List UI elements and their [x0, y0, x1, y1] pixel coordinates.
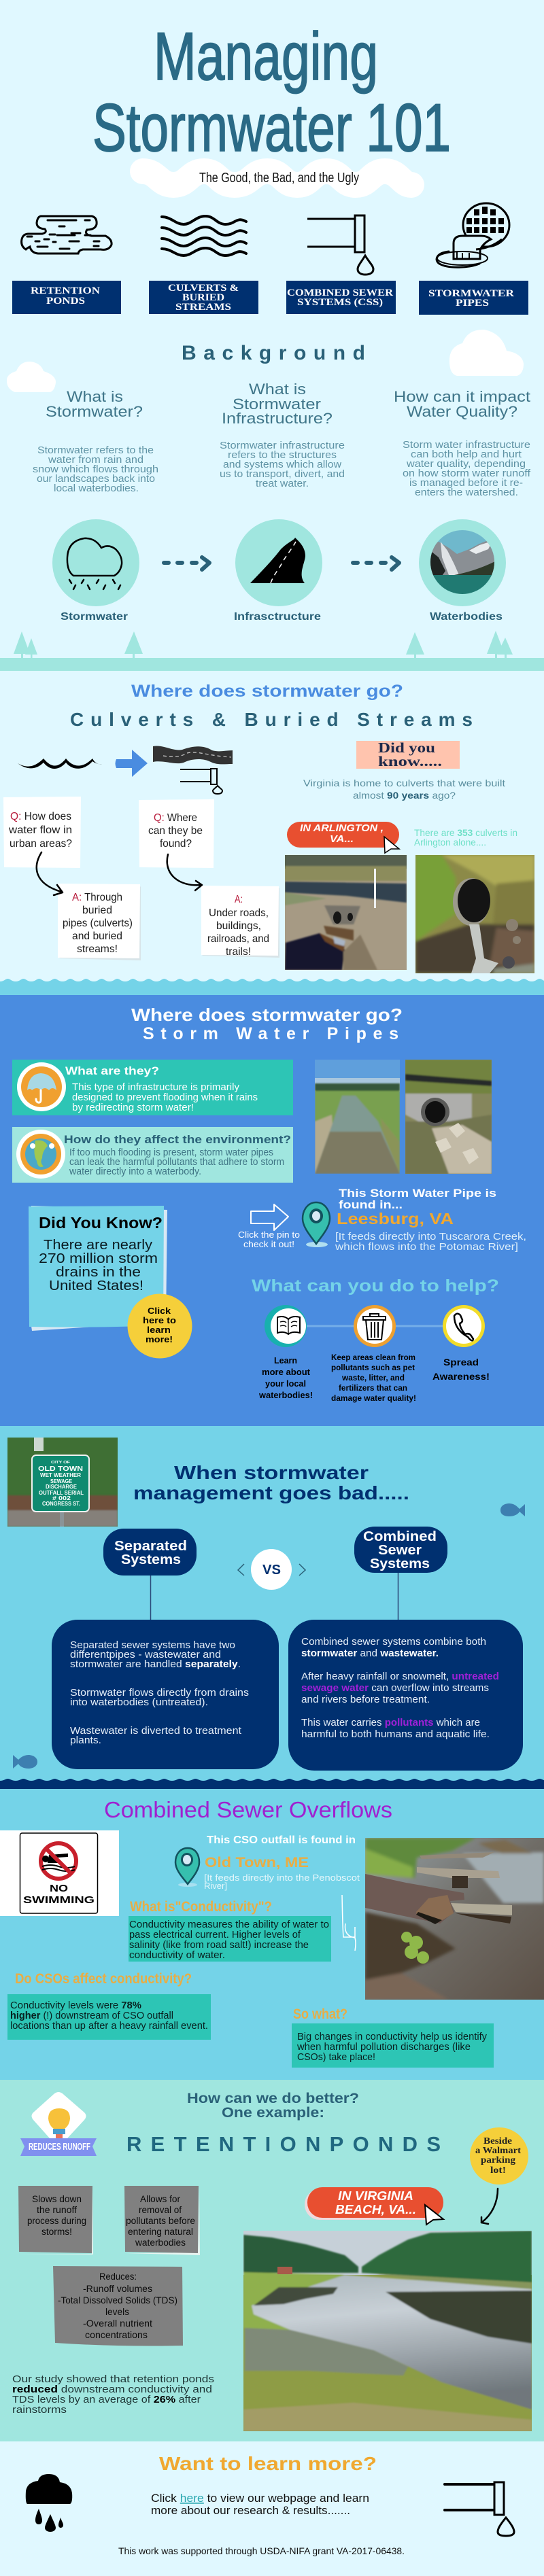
panel: separated systems: differentpipes - wastewater and — [70, 1650, 221, 1660]
arrow: dashed one — [164, 557, 209, 570]
heading: when stormwater management goes bad — [133, 1462, 409, 1503]
card: question one: water flow in — [8, 824, 72, 836]
text: virginia culverts fact: Virginia is home to culverts that were built — [303, 778, 505, 788]
panel: how do they affect the environment: can leak the harmful pollutants that adhere to storm — [69, 1157, 284, 1168]
heading: how can we do better: One example: — [222, 2105, 324, 2121]
card: answer one: A: Through — [72, 892, 122, 903]
heading: want to learn more: Want to learn more? — [159, 2453, 377, 2474]
panel: combined sewer systems: harmful to both humans and aquatic life. — [301, 1729, 490, 1740]
label: separated systems: Systems — [121, 1552, 181, 1567]
photo: old town sign: DISCHARGE — [46, 1484, 78, 1490]
panel: what is stormwater: snow which flows through — [33, 464, 158, 475]
label: combined sewer systems: Combined — [363, 1529, 437, 1544]
text: click the pin: check it out! — [243, 1239, 294, 1249]
card: reduces: -Total Dissolved Solids (TDS) — [58, 2295, 177, 2305]
text: learn more: waterbodies! — [258, 1391, 313, 1400]
text: old town: [It feeds directly into the Penobscot — [204, 1873, 360, 1883]
badge: reduces runoff: REDUCES RUNOFF — [29, 2141, 90, 2153]
topic labels: PONDS — [46, 296, 85, 307]
icon: telephone — [443, 1305, 485, 1347]
panel: what is stormwater infrastructure: What is — [249, 381, 306, 398]
text: keep areas clean — [331, 1354, 416, 1403]
heading: combined sewer overflows: Combined Sewer Overflows — [104, 1797, 392, 1822]
text: virginia culverts fact — [303, 778, 505, 801]
arrow: curved black — [481, 2189, 498, 2224]
panel: so what — [292, 2006, 494, 2068]
topic labels: RETENTION — [31, 285, 100, 296]
image: no swimming sign: SWIMMING — [23, 1894, 95, 1906]
card: slows down: the runoff — [37, 2205, 77, 2215]
card: answer one: streams! — [77, 943, 118, 955]
panel: water quality impact: Water Quality? — [407, 403, 517, 420]
icon: book — [265, 1305, 307, 1347]
card: reduces: levels — [105, 2306, 129, 2317]
panel: separated systems: into waterbodies (untreated). — [70, 1697, 208, 1708]
card: answer two: Under roads, — [209, 907, 269, 919]
panel: separated systems: Wastewater is diverted to treatment — [70, 1726, 241, 1737]
button: click here: learn — [147, 1325, 171, 1335]
text: pipe location: found in... — [339, 1198, 403, 1211]
panel: do csos affect conductivity: locations than up after a heavy rainfall event. — [10, 2021, 208, 2032]
image: no swimming sign: NO — [50, 1883, 68, 1894]
panel: water quality impact: can both help and hurt — [411, 449, 522, 460]
panel: what is conductivity — [129, 1899, 331, 1962]
text: study results — [12, 2373, 214, 2416]
heading: where does stormwater go: Where does stormwater go? — [131, 682, 403, 701]
card: answer one — [58, 884, 141, 960]
callout: did you know card: United States! — [49, 1278, 143, 1293]
card: reduces: -Runoff volumes — [83, 2283, 152, 2294]
callout: did you know card — [29, 1206, 167, 1331]
arrow: dashed two — [353, 557, 399, 570]
text: spread awareness — [432, 1357, 490, 1382]
panel: what is stormwater: Stormwater? — [46, 403, 143, 420]
panel: what is stormwater infrastructure: treat water. — [256, 478, 309, 489]
photo: leesburg channel — [315, 1060, 400, 1174]
arrow: curved two — [167, 854, 202, 890]
text: pipe location: which flows into the Potomac River] — [335, 1241, 518, 1253]
callout: beside a walmart: parking — [481, 2155, 515, 2165]
subtitle on white wave: The Good, the Bad, and the Ugly — [199, 171, 359, 186]
photo: old town sign — [7, 1438, 118, 1527]
panel: what is stormwater: local waterbodies. — [54, 483, 139, 494]
card: allows for removal: removal of — [139, 2205, 182, 2215]
panel: so what: So what? — [293, 2006, 347, 2022]
panel: what are they: by redirecting storm water! — [72, 1102, 194, 1113]
heading: when stormwater management goes bad: management goes bad..... — [133, 1482, 409, 1503]
panel: what is stormwater infrastructure: Stormwater — [233, 396, 321, 413]
panel: what is stormwater: water from rain and — [48, 454, 143, 466]
captions for flow: Stormwater — [61, 611, 128, 623]
icon: trash can — [354, 1305, 396, 1347]
text: pipe location — [335, 1187, 526, 1253]
photo: old town sign: SEWAGE — [50, 1478, 73, 1484]
icon: storm drain grate and pipe — [437, 203, 509, 267]
text: pipe location: [It feeds directly into Tuscarora Creek, — [335, 1231, 526, 1242]
card: allows for removal — [124, 2186, 200, 2255]
callout: in arlington — [287, 822, 399, 853]
panel: how do they affect the environment — [12, 1127, 293, 1183]
panel: what are they: This type of infrastructure is primarily — [72, 1081, 239, 1093]
text: click here: more about our research & results....... — [151, 2504, 350, 2517]
photo: retention pond — [243, 2231, 532, 2431]
topic labels: COMBINED SEWER — [287, 288, 393, 298]
panel: separated systems: stormwater are handled separately . — [70, 1659, 241, 1670]
card: answer one: and buried — [72, 930, 122, 942]
panel: do csos affect conductivity: Do CSOs affect conductivity? — [15, 1971, 192, 1987]
card: answer two: A: — [235, 894, 243, 905]
icon: waterbodies circle — [419, 519, 506, 606]
panel: what is stormwater infrastructure: us to transport, divert, and — [220, 468, 345, 480]
panel: water quality impact: on how storm water runoff — [403, 468, 531, 479]
trees — [14, 631, 513, 659]
icon: fish right — [500, 1503, 525, 1516]
title — [92, 18, 451, 165]
card: allows for removal: entering natural — [128, 2227, 193, 2237]
text: study results: reduced downstream conductivity and — [12, 2384, 212, 2395]
panel: so what: when harmful pollution discharges (like — [296, 2042, 471, 2053]
panel: combined sewer systems — [288, 1620, 523, 1771]
panel: how do they affect the environment: How do they affect the environment? — [64, 1133, 291, 1146]
text: click the pin — [238, 1230, 300, 1249]
text: keep areas clean: damage water quality! — [331, 1395, 416, 1403]
callout: did you know card: 270 million storm — [39, 1251, 158, 1266]
callout: did you know: know..... — [378, 753, 442, 769]
heading: culverts and buried streams: Culverts & Buried Streams — [70, 709, 473, 730]
text: virginia culverts fact: almost 90 years ago? — [353, 790, 456, 801]
text: old town: Old Town, ME — [205, 1855, 309, 1870]
callout: did you know card: There are nearly — [44, 1238, 152, 1253]
panel: what are they: What are they? — [65, 1064, 159, 1077]
callout: beside a walmart: Beside — [483, 2136, 512, 2146]
panel: water quality impact: How can it impact — [394, 388, 530, 405]
card: question two: Q: Where — [154, 812, 197, 824]
arrow: white outline to pin — [251, 1204, 288, 1230]
text: click here: Click here to view our webpage and learn — [151, 2492, 369, 2505]
photo: old town sign: OLD TOWN — [38, 1465, 83, 1473]
heading: background: Background — [182, 342, 365, 364]
panel: what are they — [12, 1060, 293, 1115]
icon: buried stream waves — [162, 216, 246, 256]
callout: in arlington: IN ARLINGTON , — [300, 822, 384, 834]
captions for flow: Infrasctructure — [234, 611, 321, 623]
card: question one: urban areas? — [10, 838, 72, 850]
panel: do csos affect conductivity: Conductivity levels were 78% — [10, 2000, 141, 2011]
panel: separated systems: Stormwater flows directly from drains — [70, 1688, 249, 1699]
clouds — [7, 330, 524, 392]
card: reduces: concentrations — [85, 2329, 148, 2340]
callout: beside a walmart — [470, 2127, 528, 2185]
badge: reduces runoff — [20, 2092, 97, 2156]
photo: old town sign: CONGRESS ST. — [42, 1501, 80, 1507]
card: answer two: buildings, — [216, 920, 261, 932]
icon: location pin cso — [175, 1848, 199, 1887]
topic labels: PIPES — [456, 298, 489, 309]
panel: separated systems: Separated sewer systems have two — [70, 1640, 235, 1651]
callout: beside a walmart: a Walmart — [475, 2145, 522, 2155]
icon: umbrella — [17, 1062, 66, 1111]
panel: separated systems — [52, 1620, 279, 1769]
text: old town: River] — [204, 1881, 227, 1891]
button: click here: Click — [148, 1306, 171, 1316]
photo: old town sign: # 002 — [52, 1495, 71, 1501]
connector lines — [306, 1325, 443, 1327]
topic labels: SYSTEMS (CSS) — [297, 297, 383, 308]
card: allows for removal: pollutants before — [126, 2216, 195, 2226]
callout: did you know card: Did You Know? — [39, 1214, 163, 1232]
heading: storm water pipes: Storm Water Pipes — [143, 1024, 398, 1043]
panel: do csos affect conductivity — [7, 1971, 211, 2040]
card: slows down: process during — [27, 2216, 86, 2226]
label: combined sewer systems: Sewer — [378, 1543, 422, 1558]
panel: what is conductivity: Conductivity measures the ability of water to — [129, 1919, 329, 1930]
panel: combined sewer systems: Combined sewer systems combine both — [301, 1637, 486, 1648]
icon: infrastructure road circle — [235, 519, 322, 606]
panel: what is stormwater — [33, 388, 158, 494]
card: slows down: Slows down — [32, 2194, 82, 2204]
panel: what is stormwater infrastructure — [220, 381, 345, 489]
label: combined sewer systems — [354, 1527, 447, 1573]
text: arlington culverts count: There are 353 culverts in — [414, 827, 517, 838]
icon: sewer pipe footer — [445, 2482, 514, 2536]
card: slows down: storms! — [41, 2227, 72, 2237]
icon: fish left — [13, 1755, 37, 1769]
text: study results: Our study showed that retention ponds — [12, 2373, 214, 2385]
topic labels: STREAMS — [175, 302, 231, 313]
heading: when stormwater management goes bad: When stormwater — [174, 1462, 369, 1483]
text: study results: rainstorms — [12, 2404, 67, 2416]
photo: old town sign: CITY OF — [51, 1461, 70, 1465]
heading: where does stormwater go, pipes: Where does stormwater go? — [131, 1005, 403, 1025]
text: spread awareness: Spread — [443, 1357, 479, 1368]
card: answer two — [201, 886, 279, 958]
panel: what is stormwater: our landscapes back into — [37, 473, 155, 485]
text: pipe location: This Storm Water Pipe is — [339, 1187, 496, 1200]
card: question two: can they be — [148, 825, 203, 837]
heading: what can you do to help: What can you do to help? — [252, 1276, 499, 1295]
heading: retention ponds: RETENTIONPONDS — [126, 2132, 441, 2156]
panel: combined sewer systems: sewage water can overflow into streams — [301, 1683, 489, 1694]
arrow: curved one — [37, 852, 63, 895]
panel: combined sewer systems: and rivers before treatment. — [301, 1694, 430, 1705]
photo: old town sign: WET WEATHER — [40, 1472, 81, 1478]
image: no swimming sign — [0, 1830, 119, 1916]
card: allows for removal: Allows for — [140, 2194, 181, 2204]
text: keep areas clean: fertilizers that can — [339, 1385, 407, 1393]
text: keep areas clean: Keep areas clean from — [331, 1354, 415, 1362]
panel: water quality impact — [394, 388, 531, 498]
icon: location pin — [303, 1202, 330, 1247]
card: reduces: -Overall nutrient — [83, 2318, 152, 2329]
card: question one: Q: How does — [10, 811, 71, 822]
text: study results: TDS levels by an average of 26% after — [12, 2394, 201, 2405]
card: question two: found? — [160, 838, 192, 850]
icon: water line — [18, 759, 103, 769]
text: pipe location: Leesburg, VA — [337, 1210, 454, 1228]
panel: what is stormwater: Stormwater refers to the — [37, 445, 154, 456]
arrow: thin white — [342, 1895, 356, 1951]
panel: what is stormwater infrastructure: Stormwater infrastructure — [220, 440, 345, 451]
panel: combined sewer systems: After heavy rainfall or snowmelt, untreated — [301, 1671, 499, 1682]
text: arlington culverts count — [414, 827, 517, 848]
photo: culvert outfall — [415, 855, 534, 973]
topic labels: STORMWATER — [428, 288, 514, 299]
connector lines — [151, 1573, 398, 1620]
topic labels — [12, 281, 528, 315]
card: question two — [139, 799, 214, 868]
card: question one — [3, 797, 81, 868]
topic labels: CULVERTS & — [168, 283, 239, 294]
panel: what are they: designed to prevent flooding when it rains — [72, 1092, 258, 1103]
button: click here — [128, 1294, 192, 1358]
text: learn more: your local — [265, 1379, 306, 1389]
heading: how can we do better: How can we do better? — [187, 2091, 359, 2106]
icon: retention pond — [22, 216, 112, 254]
card: reduces: Reduces: — [99, 2271, 137, 2282]
text: learn more: Learn — [274, 1356, 297, 1365]
label: separated systems — [103, 1529, 197, 1576]
icon: wavy road — [153, 746, 233, 764]
text: spread awareness: Awareness! — [432, 1371, 490, 1382]
badge: versus — [238, 1549, 305, 1590]
panel: what is stormwater: What is — [67, 388, 123, 405]
button: click here: more! — [146, 1334, 173, 1344]
text: funding acknowledgment: This work was supported through USDA-NIFA grant VA-2017-06438. — [118, 2546, 405, 2556]
callout: beside a walmart: lot! — [490, 2165, 506, 2175]
callout: in arlington: VA... — [330, 833, 354, 845]
callout: did you know: Did you — [378, 739, 435, 756]
icon: small pipe — [180, 769, 222, 794]
panel: how do they affect the environment: If too much flooding is present, storm water pipes — [69, 1147, 273, 1158]
panel: do csos affect conductivity: higher (!) downstream of CSO outfall — [10, 2011, 173, 2021]
badge: versus: VS — [262, 1563, 281, 1578]
text: learn more: more about — [262, 1368, 311, 1377]
callout: did you know — [356, 739, 460, 769]
label: separated systems: Separated — [114, 1539, 187, 1554]
text: keep areas clean: pollutants such as pet — [331, 1364, 415, 1372]
panel: what is conductivity: salinity (like from road salt!) increase the — [129, 1940, 309, 1951]
card: answer one: pipes (culverts) — [63, 918, 133, 929]
photo: leesburg pipe — [405, 1060, 492, 1174]
arrow: blue — [116, 750, 148, 777]
card: answer one: buried — [82, 905, 112, 916]
panel: what is conductivity: What is"Conductivity"? — [130, 1899, 272, 1915]
panel: water quality impact: water quality, depending — [406, 458, 526, 470]
callout: in virginia beach: BEACH, VA... — [335, 2203, 416, 2216]
panel: what is stormwater infrastructure: refers to the structures — [228, 449, 337, 461]
text: learn more — [258, 1356, 313, 1400]
icon: combined sewer pipe — [307, 215, 373, 275]
topic labels: BURIED — [182, 292, 224, 303]
panel: combined sewer systems: This water carries pollutants which are — [301, 1718, 480, 1728]
text: cso outfall location: This CSO outfall is found in — [207, 1834, 356, 1846]
panel: separated systems: plants. — [70, 1735, 101, 1746]
text: old town — [204, 1855, 360, 1891]
card: allows for removal: waterbodies — [135, 2238, 186, 2248]
heading: how can we do better — [187, 2091, 359, 2121]
button: click here: here to — [143, 1315, 176, 1325]
card: answer two: railroads, and — [207, 933, 269, 945]
icon: rain cloud — [26, 2474, 72, 2532]
panel: combined sewer systems: stormwater and wastewater. — [301, 1648, 439, 1659]
panel: so what: Big changes in conductivity help us identify — [297, 2032, 488, 2042]
card: answer two: trails! — [226, 946, 251, 958]
photo: roadside culvert — [285, 855, 407, 970]
callout: in virginia beach: IN VIRGINIA — [338, 2189, 413, 2203]
text: keep areas clean: waste, litter, and — [341, 1374, 405, 1382]
panel: what is conductivity: pass electrical current. Higher levels of — [129, 1930, 301, 1940]
panel: what is conductivity: conductivity of water. — [129, 1950, 225, 1961]
text: arlington culverts count: Arlington alone.... — [414, 837, 486, 848]
card: reduces — [53, 2266, 183, 2346]
panel: so what: CSOs) take place! — [297, 2052, 375, 2063]
text: click the pin: Click the pin to — [238, 1230, 300, 1240]
captions for flow — [61, 611, 503, 623]
title: Managing — [154, 18, 378, 94]
callout: in virginia beach — [305, 2187, 443, 2225]
photo: cso outfall — [365, 1838, 544, 2000]
captions for flow: Waterbodies — [430, 611, 503, 623]
text: click here — [151, 2492, 369, 2517]
panel: what is stormwater infrastructure: and systems which allow — [223, 459, 341, 470]
card: slows down — [18, 2186, 93, 2255]
photo: old town sign: OUTFALL SERIAL — [39, 1490, 84, 1496]
panel: water quality impact: is managed before it re- — [409, 477, 523, 489]
panel: what is stormwater infrastructure: Infrastructure? — [222, 410, 333, 427]
callout: did you know card: drains in the — [56, 1265, 141, 1280]
panel: water quality impact: enters the watershed. — [415, 487, 518, 498]
icon: earth — [16, 1130, 65, 1179]
panel: how do they affect the environment: water directly into a waterbody. — [69, 1166, 201, 1177]
icon: stormwater circle — [52, 519, 139, 606]
panel: water quality impact: Storm water infrastructure — [403, 439, 530, 451]
label: combined sewer systems: Systems — [370, 1556, 430, 1571]
